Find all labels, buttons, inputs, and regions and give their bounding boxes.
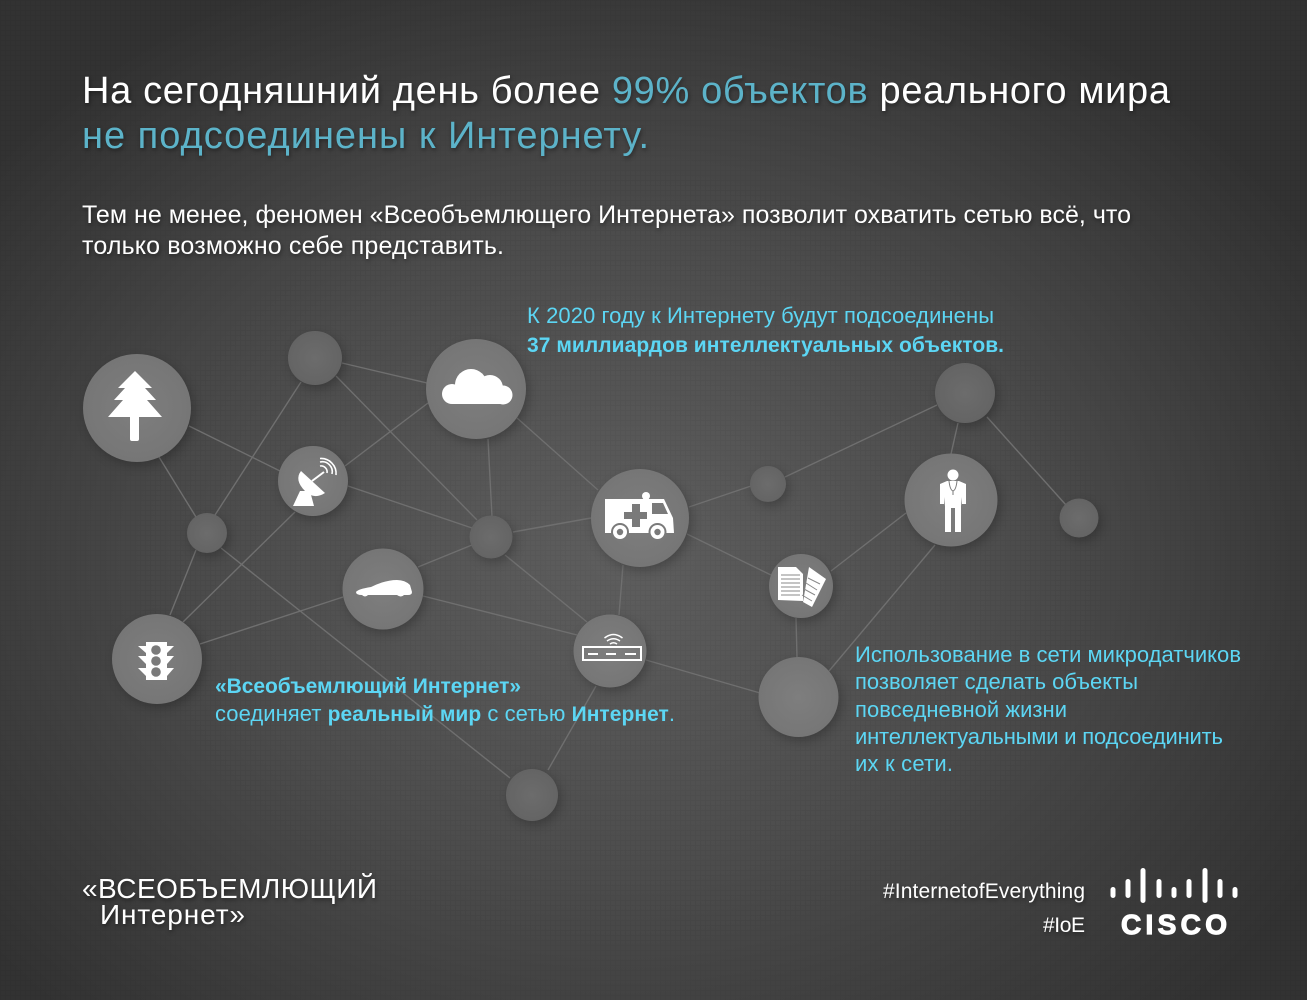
callout: micro sensors: интеллектуальными и подсоединить — [855, 724, 1223, 749]
node: person — [904, 454, 998, 546]
node: ambulance — [591, 469, 689, 567]
node: car — [342, 548, 424, 630]
node: small left — [187, 513, 227, 553]
icon: cloud — [442, 369, 512, 404]
icon: tree — [108, 371, 162, 441]
node: documents — [769, 554, 833, 618]
node: traffic light — [112, 614, 202, 704]
callout: internet of everything connects: соединяет реальный мир с сетью Интернет. — [215, 701, 675, 726]
node: small far right — [1060, 498, 1098, 538]
node: small bottom — [506, 769, 558, 821]
node: large empty — [758, 657, 838, 737]
callout: micro sensors: Использование в сети микродатчиков — [855, 642, 1241, 667]
icon: car — [356, 580, 412, 596]
node: small top right — [935, 363, 995, 423]
callout: 37 billion objects: К 2020 году к Интернету будут подсоединены — [527, 303, 994, 328]
node: small center — [470, 516, 512, 558]
icon: traffic light — [138, 642, 174, 680]
callout: micro sensors: повседневной жизни — [855, 697, 1067, 722]
callout: micro sensors — [855, 642, 1241, 776]
icon: documents — [778, 567, 826, 607]
cisco logo — [1110, 868, 1238, 940]
node: tree — [83, 354, 191, 462]
callout: 37 billion objects: 37 миллиардов интеллектуальных объектов. — [527, 334, 1004, 357]
title — [82, 70, 1171, 157]
hashtags — [883, 880, 1085, 937]
subtitle text — [82, 201, 1131, 260]
icon: person with stethoscope — [940, 470, 966, 532]
node: cloud — [426, 339, 526, 439]
title: На сегодняшний день более 99% объектов реального мира — [82, 70, 1171, 112]
title: не подсоединены к Интернету. — [82, 115, 649, 157]
callout: internet of everything connects — [215, 675, 675, 726]
cisco logo: CISCO — [1121, 909, 1227, 940]
node: small top — [288, 331, 342, 385]
icon: router — [583, 634, 641, 660]
network connection lines — [159, 363, 1066, 778]
subtitle text: только возможно себе представить. — [82, 232, 504, 260]
callout: 37 billion objects — [527, 303, 1004, 357]
subtitle text: Тем не менее, феномен «Всеобъемлющего Интернета» позволит охватить сетью всё, что — [82, 201, 1131, 229]
icon: satellite dish — [293, 458, 336, 506]
callout: micro sensors: их к сети. — [855, 751, 953, 776]
node: router — [574, 614, 646, 688]
footer wordmark: Интернет» — [100, 899, 245, 930]
hashtags: #IoE — [1043, 914, 1085, 937]
callout: internet of everything connects: «Всеобъемлющий Интернет» — [215, 675, 521, 698]
node: satellite dish — [278, 446, 348, 516]
node: small middle right — [750, 466, 786, 502]
icon: ambulance — [605, 492, 674, 541]
hashtags: #InternetofEverything — [883, 880, 1085, 903]
footer wordmark: «ВСЕОБЪЕМЛЮЩИЙ — [82, 873, 377, 904]
callout: micro sensors: позволяет сделать объекты — [855, 669, 1138, 694]
footer wordmark — [82, 873, 377, 930]
